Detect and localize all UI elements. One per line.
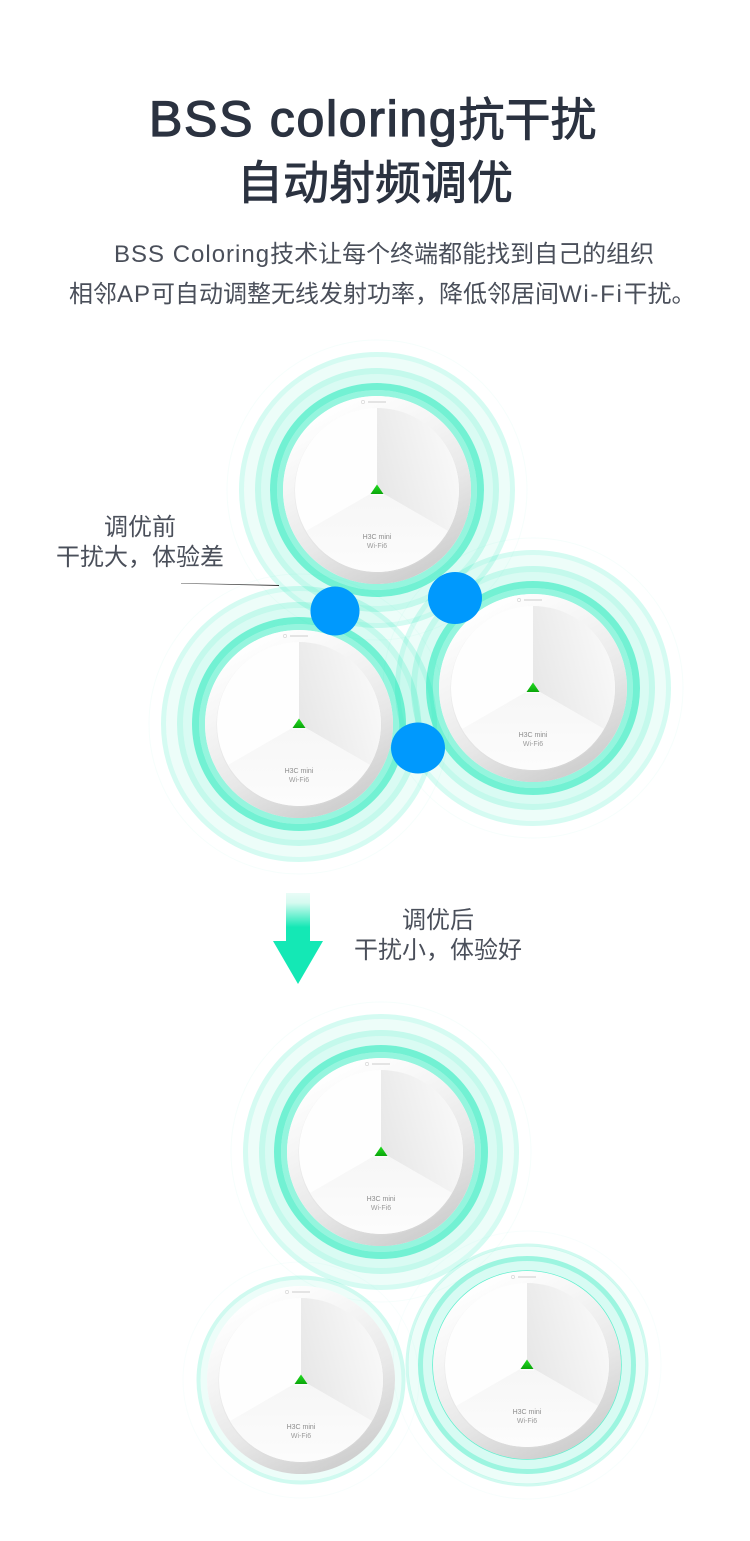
device: top router (before): H3C mini (363, 534, 392, 541)
arrow down (273, 893, 323, 984)
device: left router (before): H3C mini (285, 768, 314, 775)
device: top router (after): H3C mini (367, 1196, 396, 1203)
device: right router (before): Wi-Fi6 (523, 741, 543, 748)
interference dot: top right (428, 572, 482, 624)
device: top router (before): Wi-Fi6 (367, 543, 387, 550)
title line 2: 自动射频调优 (237, 157, 513, 209)
device: right router (after): H3C mini (513, 1409, 542, 1416)
label: after optimisation (354, 907, 522, 964)
device: left router (after): H3C mini (287, 1424, 316, 1431)
device: top router (after) (287, 1058, 475, 1246)
device: right router (after): Wi-Fi6 (517, 1418, 537, 1425)
interference dot: bottom (391, 722, 445, 774)
rings: before optimisation (149, 340, 683, 874)
device: right router (before): H3C mini (519, 732, 548, 739)
device: top router (after): Wi-Fi6 (371, 1205, 391, 1212)
device: left router (before): Wi-Fi6 (289, 777, 309, 784)
device: right router (after) (433, 1271, 621, 1459)
intro text line 1: BSS Coloring技术让每个终端都能找到自己的组织 (114, 241, 654, 268)
label: after optimisation: 调优后 (402, 907, 474, 934)
label: before optimisation: 干扰大，体验差 (56, 544, 224, 571)
intro text line 2: 相邻AP可自动调整无线发射功率，降低邻居间Wi-Fi干扰。 (69, 281, 695, 308)
device: left router (before) (205, 630, 393, 818)
label: after optimisation: 干扰小，体验好 (354, 937, 522, 964)
leader line (181, 583, 279, 586)
label: before optimisation: 调优前 (104, 514, 176, 541)
device: left router (after): Wi-Fi6 (291, 1433, 311, 1440)
device: left router (after) (207, 1286, 395, 1474)
device: top router (before) (283, 396, 471, 584)
interference dot: left (310, 586, 360, 636)
rings: after optimisation (183, 1002, 661, 1499)
title line 1: BSS coloring抗干扰 (149, 91, 596, 147)
label: before optimisation (56, 514, 224, 571)
device: right router (before) (439, 594, 627, 782)
